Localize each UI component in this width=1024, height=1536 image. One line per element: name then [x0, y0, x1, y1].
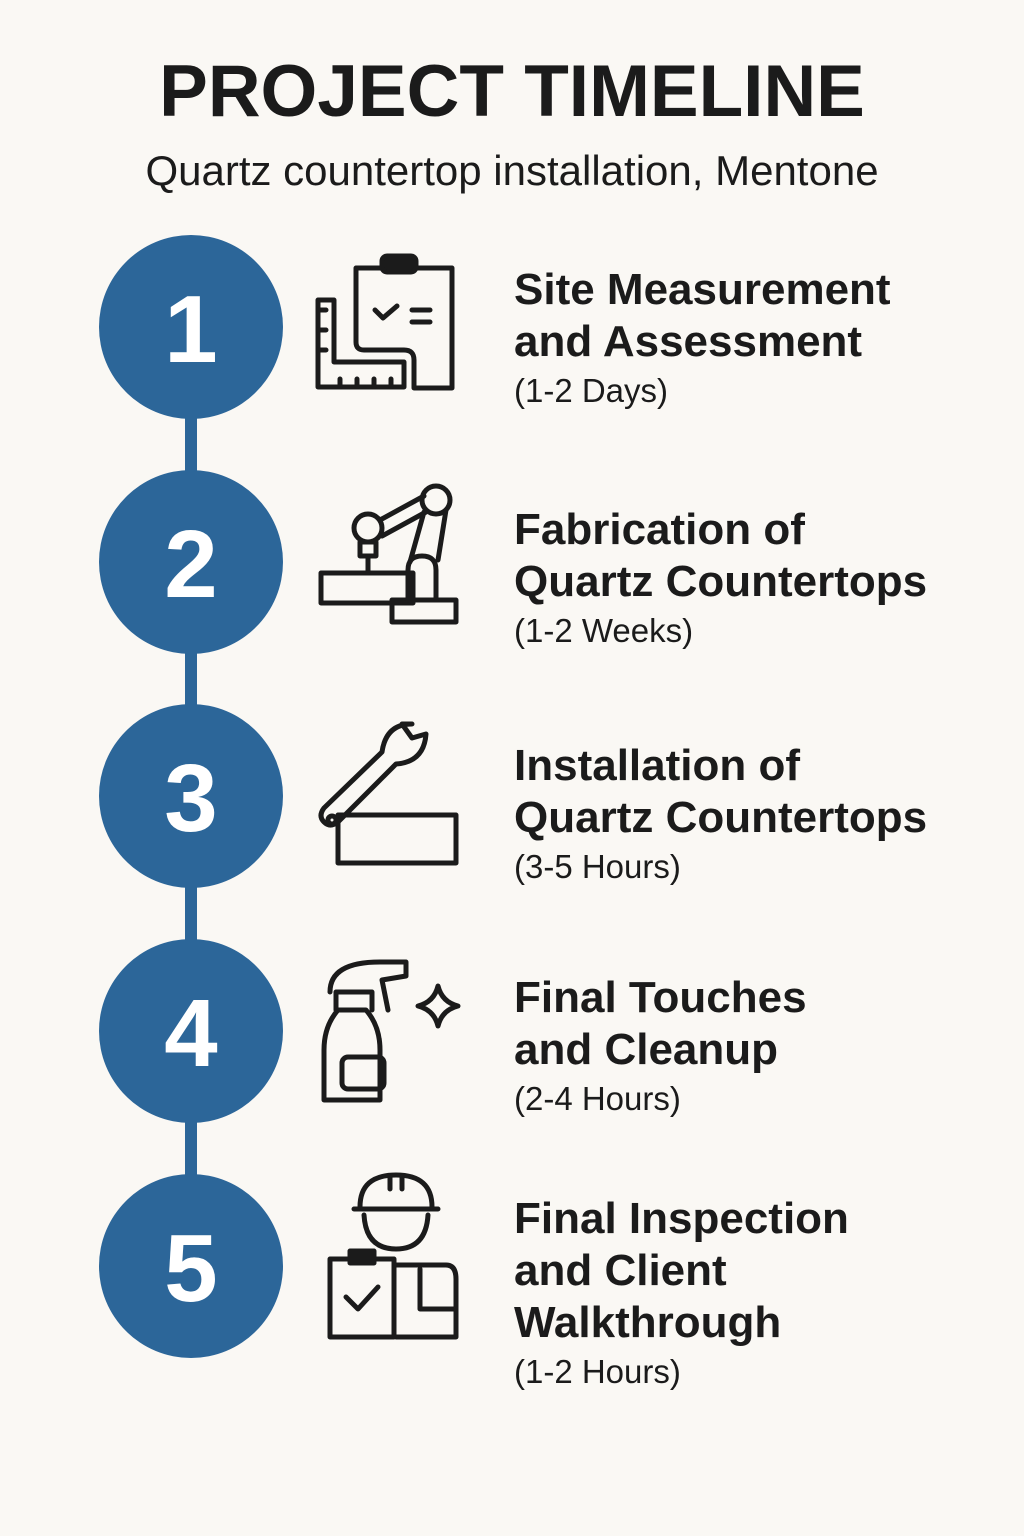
- timeline circles: 2: [164, 511, 218, 618]
- step 1 text: [514, 265, 891, 409]
- step 5 text: and Client: [514, 1246, 727, 1295]
- step 2 text: (1-2 Weeks): [514, 612, 693, 649]
- step 4 text: and Cleanup: [514, 1025, 778, 1074]
- step 5 text: (1-2 Hours): [514, 1353, 681, 1390]
- step 2 text: [514, 505, 927, 649]
- timeline circles: 3: [164, 745, 218, 852]
- step 3 text: Installation of: [514, 741, 800, 790]
- step 5 text: [514, 1194, 849, 1390]
- icon: inspector: [328, 1172, 458, 1340]
- title: PROJECT TIMELINE: [159, 51, 865, 132]
- step 2 text: Fabrication of: [514, 505, 805, 554]
- timeline circles: [99, 235, 283, 1358]
- step 4 text: (2-4 Hours): [514, 1080, 681, 1117]
- timeline circles: 1: [164, 276, 218, 383]
- step 3 text: [514, 741, 927, 885]
- step 4 text: [514, 973, 807, 1117]
- timeline circles: 4: [164, 980, 218, 1087]
- timeline circles: 5: [164, 1215, 218, 1322]
- step 1 text: Site Measurement: [514, 265, 891, 314]
- step 5 text: Walkthrough: [514, 1298, 781, 1347]
- step 1 text: and Assessment: [514, 317, 862, 366]
- step 4 text: Final Touches: [514, 973, 807, 1022]
- icon: robotic arm: [318, 484, 458, 624]
- step 3 text: Quartz Countertops: [514, 793, 927, 842]
- step 1 text: (1-2 Days): [514, 372, 668, 409]
- icon: spray bottle: [322, 960, 460, 1102]
- step 5 text: Final Inspection: [514, 1194, 849, 1243]
- step 2 text: Quartz Countertops: [514, 557, 927, 606]
- icon: wrench and slab: [318, 722, 458, 866]
- icon: clipboard and ruler: [316, 254, 454, 390]
- step 3 text: (3-5 Hours): [514, 848, 681, 885]
- subtitle: Quartz countertop installation, Mentone: [145, 147, 879, 194]
